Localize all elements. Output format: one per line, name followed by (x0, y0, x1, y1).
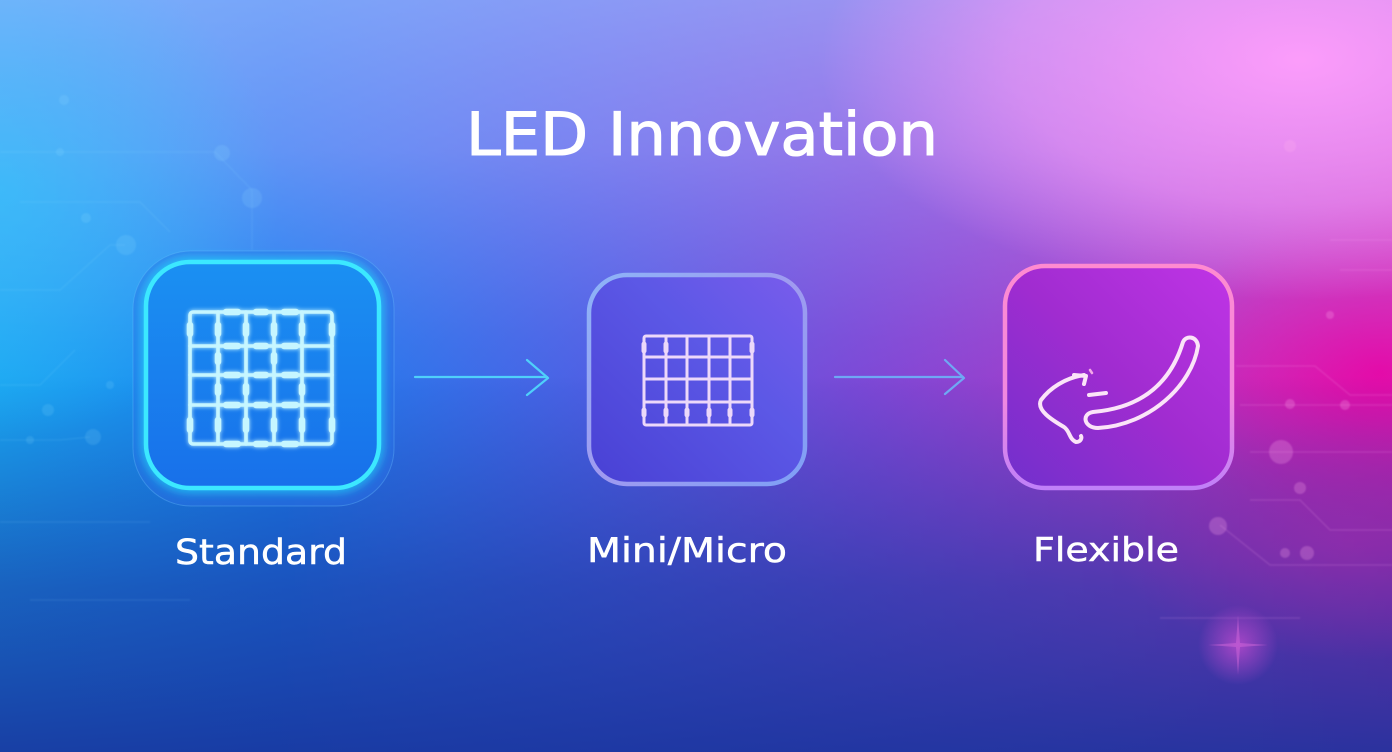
label: Standard: Standard (175, 533, 347, 573)
arrow: standard to mini (415, 360, 548, 395)
title: LED Innovation (466, 100, 938, 170)
icon: standard LED grid (190, 312, 332, 444)
icon: flexible LED strip (1040, 337, 1198, 442)
label: Mini/Micro: Mini/Micro (587, 531, 787, 571)
step: Standard (133, 251, 394, 573)
step: Flexible (1005, 266, 1232, 569)
tile: mini (589, 275, 805, 484)
tile: flexible (1005, 266, 1232, 488)
label: Flexible: Flexible (1033, 530, 1179, 569)
arrow: mini to flexible (835, 360, 964, 394)
step: Mini/Micro (587, 275, 805, 571)
decorative sparkle (1198, 605, 1278, 685)
circuit pattern: right (1160, 140, 1392, 618)
circuit pattern: left (0, 95, 262, 600)
icon: mini LED grid (644, 336, 752, 425)
tile: standard (133, 251, 394, 506)
